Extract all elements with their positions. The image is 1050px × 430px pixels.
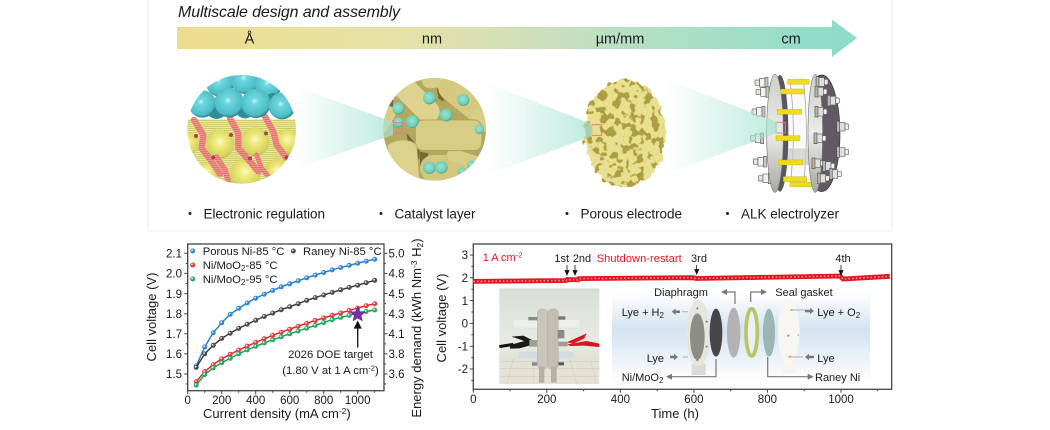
axis labels: durability chart: Cell voltage (V)	[434, 274, 449, 362]
axis labels: durability chart: 1000	[828, 394, 854, 406]
axis labels: polarization chart: 600	[280, 395, 299, 407]
labels: cell components: 2	[660, 311, 665, 320]
labels: cell components: Seal gasket	[775, 287, 833, 299]
series: Raney Ni	[196, 280, 375, 367]
component: anode plate	[778, 299, 800, 373]
legend: polarization chart: Porous Ni-85 °C	[203, 246, 284, 258]
axis labels: durability chart: -1	[458, 341, 468, 353]
axis labels: polarization chart: 800	[314, 395, 333, 407]
illustration: porous electrode	[584, 79, 666, 187]
axis labels: polarization chart: )	[346, 406, 351, 421]
axis labels: polarization chart: 400	[246, 395, 265, 407]
annotations: shutdown-restart events: Shutdown-restart	[597, 253, 682, 265]
axis labels: polarization chart: 4.3	[388, 309, 404, 321]
legend: polarization chart: -95 °C	[245, 274, 278, 286]
chart: durability test	[434, 244, 892, 421]
component: cathode plate	[686, 300, 710, 375]
photo: assembled electrolyzer	[499, 288, 599, 384]
axis labels: durability chart: 600	[684, 394, 703, 406]
series: Ni/MoO2 85 C	[196, 304, 375, 382]
legend: polarization chart: Raney Ni-85 °C	[303, 246, 382, 258]
legend: polarization chart: 2	[241, 264, 246, 273]
labels: cell components: 2	[856, 311, 861, 320]
axis labels: polarization chart: 200	[212, 395, 231, 407]
axis labels: polarization chart: Energy demand (kWh Nm	[409, 268, 424, 418]
axis labels: durability chart: 800	[758, 394, 777, 406]
annotations: shutdown-restart events	[483, 250, 851, 275]
axis labels: polarization chart: 1.7	[166, 329, 182, 341]
series: Ni/MoO2 95 C	[196, 310, 375, 385]
labels: cell components: Raney Ni	[815, 372, 860, 384]
axis labels: durability chart: 1	[462, 296, 468, 308]
labels: cell components: 2	[659, 376, 664, 385]
legend: polarization chart: 2	[241, 278, 246, 287]
component: diaphragm	[727, 308, 740, 358]
axis labels: polarization chart: Cell voltage (V)	[144, 273, 159, 361]
axis labels: polarization chart: 1000	[345, 395, 370, 407]
component: seal gasket	[746, 309, 757, 356]
axis labels: polarization chart: -3	[409, 260, 419, 268]
series: cell voltage over time	[473, 276, 890, 281]
axis labels: durability chart: 400	[611, 394, 630, 406]
legend: polarization chart: Ni/MoO	[203, 260, 241, 272]
illustration: atomic structure	[187, 75, 296, 184]
infographic canvas	[146, 0, 892, 420]
illustration: catalyst layer	[383, 78, 486, 181]
title: Multiscale design and assembly	[178, 4, 401, 21]
labels: scale levels: Catalyst layer	[394, 206, 476, 222]
connector arrows	[667, 292, 813, 377]
scale arrow: µm/mm	[596, 32, 644, 48]
series: Porous Ni	[196, 259, 375, 366]
block arrows: lye flow	[670, 308, 814, 360]
labels: scale levels	[188, 206, 840, 222]
annotations: shutdown-restart events: 4th	[835, 253, 851, 265]
labels: scale levels: Porous electrode	[580, 206, 682, 222]
legend: polarization chart: -85 °C	[245, 260, 278, 272]
axis labels: durability chart: 200	[537, 394, 556, 406]
axis labels: durability chart	[434, 250, 854, 421]
callout: DOE target: 2026 DOE target	[288, 349, 374, 361]
labels: cell components: Ni/MoO	[622, 372, 659, 384]
axis labels: polarization chart: )	[409, 238, 424, 243]
axis labels: polarization chart: 3.6	[388, 369, 404, 381]
axis labels: polarization chart: H	[409, 247, 424, 260]
arrow: DOE target	[355, 322, 361, 348]
axis labels: polarization chart: 2	[415, 242, 425, 247]
illustration: ALK electrolyzer	[751, 74, 849, 192]
scale arrow: Å	[245, 30, 255, 48]
callout: DOE target	[282, 349, 379, 377]
legend: polarization chart: Ni/MoO	[203, 274, 241, 286]
axis labels: durability chart: 0	[470, 394, 477, 406]
labels: cell components: Lye + H	[622, 307, 660, 319]
axis labels: durability chart: Time (h)	[651, 406, 699, 421]
zoom cones	[243, 63, 777, 185]
panel: multiscale design	[148, 0, 892, 231]
axis labels: polarization chart	[144, 238, 425, 421]
axis labels: polarization chart: Current density (mA cm	[203, 406, 339, 421]
axis labels: polarization chart: 4.8	[388, 269, 404, 281]
callout: DOE target: -2	[368, 364, 375, 372]
axis labels: polarization chart: 1.6	[166, 349, 182, 361]
axis labels: polarization chart: 4.5	[388, 289, 404, 301]
callout: DOE target: (1.80 V at 1 A cm	[282, 365, 368, 377]
axis labels: polarization chart: 2.1	[166, 248, 182, 260]
axis labels: polarization chart: 0	[184, 395, 191, 407]
axis labels: durability chart: 2	[462, 273, 468, 285]
scale arrow: cm	[781, 32, 801, 48]
scale arrow	[177, 20, 857, 57]
labels: scale levels: Electronic regulation	[204, 206, 325, 222]
scale arrow: nm	[422, 32, 442, 48]
labels: cell components: Lye	[817, 353, 835, 365]
diagram: cell components	[612, 287, 870, 385]
legend: polarization chart	[193, 246, 382, 287]
axis labels: polarization chart: 1.5	[166, 369, 182, 381]
axis labels: polarization chart: 2.0	[166, 269, 182, 281]
axis labels: polarization chart: 5.0	[388, 248, 404, 260]
chart: polarization curves	[144, 238, 425, 421]
icon: DOE target star	[350, 306, 365, 321]
axis labels: polarization chart: -2	[339, 406, 347, 416]
axis labels: polarization chart: 4.1	[388, 329, 404, 341]
component: Ni/MoO2 electrode	[710, 309, 722, 357]
axis labels: polarization chart: 1.9	[166, 289, 182, 301]
labels: cell components: Lye	[647, 353, 664, 365]
labels: scale levels: ALK electrolyzer	[741, 206, 840, 222]
labels: cell components	[622, 287, 861, 385]
annotations: shutdown-restart events: 1 A cm	[483, 252, 516, 264]
callout: DOE target: )	[375, 365, 379, 377]
annotations: shutdown-restart events: -2	[516, 250, 522, 260]
axis labels: polarization chart: 3.8	[388, 349, 404, 361]
labels: cell components: Diaphragm	[654, 287, 708, 299]
annotations: shutdown-restart events: 1st	[554, 253, 569, 265]
axis labels: polarization chart: 1.8	[166, 309, 182, 321]
annotations: shutdown-restart events: 3rd	[691, 253, 707, 265]
axis labels: durability chart: 3	[462, 250, 468, 262]
axis labels: durability chart: 0	[462, 319, 468, 331]
component: Raney Ni electrode	[763, 309, 775, 357]
annotations: shutdown-restart events: 2nd	[573, 253, 591, 265]
labels: cell components: Lye + O	[817, 307, 856, 319]
axis labels: durability chart: -2	[458, 364, 468, 376]
